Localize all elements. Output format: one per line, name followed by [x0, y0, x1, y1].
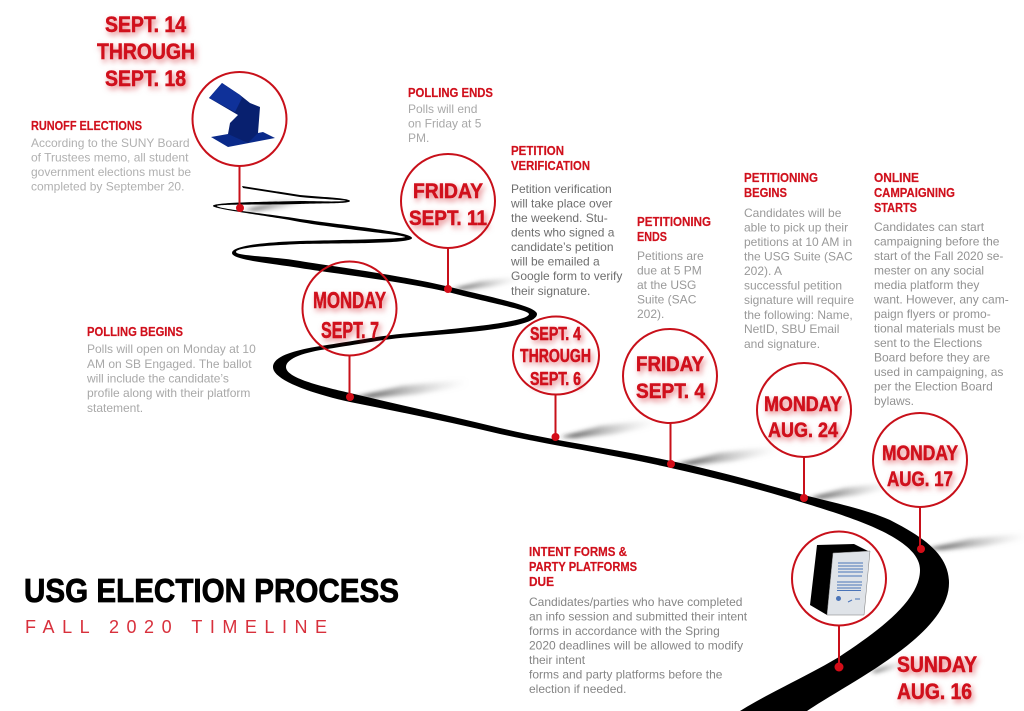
date: Sunday Aug. 16 — [897, 652, 977, 704]
text: online campaigning starts: used in campaigning, as — [874, 365, 1003, 379]
text: online campaigning starts: campaigning before the — [874, 234, 1000, 248]
text: runoff elections: government elections must be — [31, 165, 191, 179]
text: runoff elections: completed by September 20. — [31, 180, 184, 194]
text: petitioning begins: 202). A — [744, 264, 782, 278]
text: petitioning begins: the following: Name, — [744, 308, 853, 322]
text: petitioning ends: 202). — [637, 307, 664, 321]
milestone: Monday Aug. 17 — [873, 413, 967, 553]
milestone: Monday Aug. 24: AUG. 24 — [768, 419, 838, 442]
title block: USG ELECTION PROCESS — [24, 572, 399, 609]
text: intent forms and party platforms due: forms in accordance with the Spring — [529, 624, 720, 638]
text: polling begins — [86, 324, 256, 415]
text: petitioning begins — [744, 170, 854, 351]
milestone: Sept. 4 through Sept. 6: SEPT. 4 — [530, 324, 581, 344]
text: polling ends: POLLING ENDS — [408, 85, 493, 100]
text: runoff elections — [31, 118, 191, 194]
text: polling ends: Polls will end — [408, 102, 477, 116]
text: polling begins: profile along with their platform — [87, 386, 250, 400]
text: online campaigning starts: STARTS — [874, 200, 917, 215]
milestone: Friday Sept. 11: FRIDAY — [413, 180, 483, 203]
text: petition verification — [510, 143, 622, 298]
milestone: Sept. 4 through Sept. 6: SEPT. 6 — [530, 369, 581, 389]
milestone: Monday Aug. 24 — [757, 363, 851, 502]
text: online campaigning starts: start of the Fall 2020 se- — [874, 249, 1003, 263]
text: petition verification: Petition verification — [511, 182, 612, 196]
milestone: Friday Sept. 11: SEPT. 11 — [409, 207, 487, 230]
title block: FALL 2020 TIMELINE — [25, 617, 327, 637]
text: petitioning begins: BEGINS — [744, 185, 787, 200]
text: petition verification: the weekend. Stu- — [511, 211, 608, 225]
text: polling begins: Polls will open on Monday at 10 — [87, 342, 256, 356]
winding road — [213, 186, 949, 711]
text: petitioning ends: PETITIONING — [637, 214, 711, 229]
text: petitioning ends: ENDS — [637, 229, 667, 244]
milestone: Sunday Aug. 16 — [792, 532, 886, 672]
milestone: Monday Sept. 7: SEPT. 7 — [321, 317, 379, 343]
text: polling begins: statement. — [87, 401, 143, 415]
milestone: Monday Aug. 24: MONDAY — [764, 393, 842, 416]
text: online campaigning starts: want. However, any cam- — [873, 292, 1009, 306]
date: Sunday Aug. 16: AUG. 16 — [897, 679, 972, 704]
text: online campaigning starts: Board before they are — [874, 350, 990, 364]
date: Sept. 14 through Sept. 18 — [97, 12, 195, 91]
text: polling begins: will include the candidate’s — [86, 372, 229, 386]
text: petitioning ends — [637, 214, 711, 321]
text: polling ends: PM. — [408, 131, 429, 145]
text: petitioning begins: and signature. — [744, 337, 820, 351]
milestone: Sept. 4 through Sept. 6 — [513, 316, 599, 441]
text: intent forms and party platforms due: PARTY PLATFORMS — [529, 559, 637, 574]
milestone: Friday Sept. 4 — [623, 329, 717, 468]
text: petition verification: Google form to verify — [511, 269, 622, 283]
milestone: Monday Aug. 17: AUG. 17 — [887, 468, 953, 491]
text: petitioning begins: successful petition — [744, 278, 842, 292]
text: petitioning begins: able to pick up their — [744, 220, 848, 234]
text: online campaigning starts: paign flyers or promo- — [874, 307, 991, 321]
title block — [24, 572, 399, 637]
milestone: Monday Sept. 7 — [302, 262, 396, 401]
milestone: runoff elections — [192, 72, 286, 212]
milestone: Friday Sept. 4: FRIDAY — [636, 353, 704, 376]
text: online campaigning starts — [873, 170, 1009, 408]
text: petitioning ends: due at 5 PM — [637, 264, 702, 278]
text: online campaigning starts: bylaws. — [874, 394, 914, 408]
text: online campaigning starts: media platform they — [874, 278, 979, 292]
text: petition verification: candidate’s petition — [511, 240, 614, 254]
text: intent forms and party platforms due: forms and party platforms before the — [529, 668, 723, 682]
text: polling begins: POLLING BEGINS — [87, 324, 183, 339]
text: petitioning begins: NetID, SBU Email — [744, 322, 839, 336]
text: intent forms and party platforms due: Candidates/parties who have completed — [529, 595, 742, 609]
text: intent forms and party platforms due: an info session and submitted their intent — [529, 610, 748, 624]
milestone: Monday Aug. 17: MONDAY — [882, 442, 958, 465]
milestone: Friday Sept. 4: SEPT. 4 — [636, 380, 705, 403]
date: Sept. 14 through Sept. 18: SEPT. 14 — [105, 12, 187, 37]
text: petitioning ends: at the USG — [637, 278, 696, 292]
text: polling ends: on Friday at 5 — [408, 116, 482, 130]
text: runoff elections: RUNOFF ELECTIONS — [31, 118, 142, 133]
text: polling begins: AM on SB Engaged. The ballot — [87, 357, 252, 371]
text: polling ends — [408, 85, 493, 145]
milestone: Friday Sept. 11 — [401, 154, 495, 293]
text: petition verification: their signature. — [511, 284, 590, 298]
text: online campaigning starts: sent to the Elections — [874, 336, 982, 350]
text: petition verification: will take place over — [510, 196, 612, 210]
text: petitioning ends: Petitions are — [637, 249, 704, 263]
text: petitioning ends: Suite (SAC — [637, 292, 697, 306]
date: Sept. 14 through Sept. 18: SEPT. 18 — [105, 66, 186, 91]
text: online campaigning starts: CAMPAIGNING — [874, 185, 955, 200]
text: online campaigning starts: Candidates can start — [874, 220, 985, 234]
text: intent forms and party platforms due: INTENT FORMS & — [529, 544, 627, 559]
text: petitioning begins: the USG Suite (SAC — [744, 250, 853, 264]
text: online campaigning starts: mester on any social — [874, 264, 984, 278]
date: Sunday Aug. 16: SUNDAY — [897, 652, 977, 677]
text: runoff elections: According to the SUNY Board — [31, 136, 190, 150]
text: online campaigning starts: ONLINE — [874, 170, 919, 185]
text: intent forms and party platforms due: election if needed. — [529, 682, 626, 696]
text: online campaigning starts: per the Election Board — [874, 380, 993, 394]
milestone: Sept. 4 through Sept. 6: THROUGH — [520, 346, 591, 366]
road shadows — [245, 197, 1024, 673]
text: petition verification: VERIFICATION — [511, 158, 590, 173]
text: runoff elections: of Trustees memo, all student — [31, 150, 189, 164]
text: petition verification: will be emailed a — [510, 254, 600, 268]
date: Sept. 14 through Sept. 18: THROUGH — [97, 39, 195, 64]
text: petitioning begins: PETITIONING — [744, 170, 818, 185]
text: intent forms and party platforms due — [529, 544, 748, 696]
text: petitioning begins: Candidates will be — [744, 206, 842, 220]
text: online campaigning starts: tional materials must be — [874, 322, 1001, 336]
icon: document box — [810, 544, 870, 615]
text: petitioning begins: petitions at 10 AM in — [744, 235, 852, 249]
text: intent forms and party platforms due: 2020 deadlines will be allowed to modify — [529, 638, 743, 652]
text: petitioning begins: signature will require — [744, 293, 854, 307]
text: petition verification: dents who signed a — [511, 226, 615, 240]
icon: ballot box — [209, 83, 275, 147]
text: petition verification: PETITION — [511, 143, 564, 158]
text: intent forms and party platforms due: DUE — [529, 574, 554, 589]
text: intent forms and party platforms due: their intent — [529, 653, 586, 667]
milestone: Monday Sept. 7: MONDAY — [313, 287, 386, 313]
